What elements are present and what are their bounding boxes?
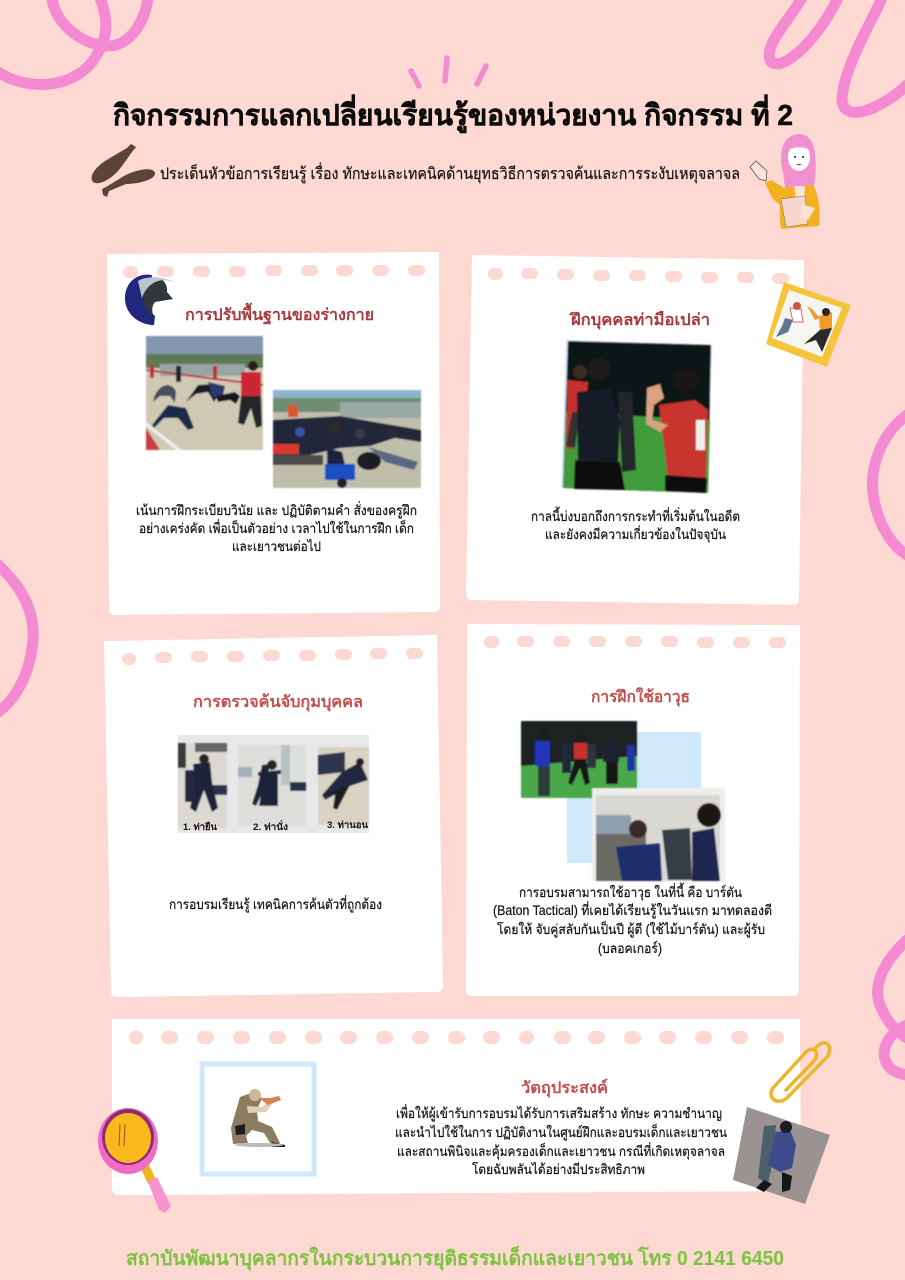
- footer contact: สถาบันพัฒนาบุคลากรในกระบวนการยุติธรรมเด็กและเยาวชน โทร 0 2141 6450: [126, 1245, 784, 1271]
- body text: กาลนี้บ่งบอกถึงการกระทำที่เริ่มต้นในอดีต: [531, 506, 740, 524]
- icon: woman with clipboard: [750, 134, 820, 229]
- icon: riot officer sticker: [733, 1107, 830, 1204]
- heading: การตรวจค้นจับกุมบุคคล: [193, 693, 363, 712]
- panel: search and arrest: [104, 635, 443, 997]
- body text: การอบรมสามารถใช้อาวุธ ในที่นี้ คือ บาร์ตัน: [519, 882, 742, 901]
- heading: การฝึกใช้อาวุธ: [591, 687, 690, 707]
- icon: helmet: [125, 275, 175, 325]
- body text: และนำไปใช้ในการ ปฏิบัติงานในศูนย์ฝึกและอบรมเด็กและเยาวชน: [395, 1123, 727, 1141]
- body text: (บลอคเกอร์): [598, 940, 662, 956]
- subtitle: ประเด็นหัวข้อการเรียนรู้ เรื่อง ทักษะและเทคนิคด้านยุทธวิธีการตรวจค้นและการระงับเหตุจลาจล: [160, 162, 740, 184]
- title: กิจกรรมการแลกเปลี่ยนเรียนรู้ของหน่วยงาน กิจกรรม ที่ 2: [113, 94, 793, 133]
- heading: วัตถุประสงค์: [521, 1078, 608, 1098]
- binder holes: [129, 1030, 784, 1044]
- frame with soldier icon: [202, 1064, 314, 1174]
- photo strip: search positions: 2. ท่านั่ง: [253, 819, 288, 833]
- body text: (Baton Tactical) ที่เคยได้เรียนรู้ในวันแรก มาทดลองตี: [493, 901, 772, 919]
- body text: และเยาวชนต่อไป: [232, 539, 321, 554]
- panel: body conditioning: [107, 252, 440, 615]
- photo strip: search positions: [178, 735, 369, 833]
- binder holes: [123, 265, 425, 278]
- icon: fighting couple sticker: [766, 282, 851, 367]
- photo strip: search positions: 3. ท่านอน: [327, 820, 369, 831]
- binder holes: [484, 636, 786, 648]
- body text: โดยให้ จับคู่สลับกันเป็นปี ผู้ตี (ใช้ไม้บาร์ตัน) และผู้รับ: [497, 920, 765, 938]
- body text: [493, 882, 772, 956]
- body text: [531, 506, 740, 543]
- panel: objectives: [112, 1019, 801, 1195]
- body text: การอบรมเรียนรู้ เทคนิคการค้นตัวที่ถูกต้อง: [169, 895, 382, 913]
- icon: sparkle strokes above title: [411, 58, 486, 86]
- body text: เพื่อให้ผู้เข้ารับการอบรมได้รับการเสริมสร้าง ทักษะ ความชำนาญ: [396, 1104, 722, 1122]
- icon: magnifying glass: [98, 1108, 171, 1213]
- body text: และสถานพินิจและคุ้มครองเด็กและเยาวชน กรณีที่เกิดเหตุจลาจล: [397, 1142, 725, 1160]
- panel: empty-hand training: [466, 255, 851, 605]
- icon: wooden batons: [92, 144, 155, 197]
- photo: pad striking: [561, 340, 712, 493]
- heading: การปรับพื้นฐานของร่างกาย: [185, 302, 374, 325]
- binder holes: [122, 648, 423, 665]
- body text: [395, 1104, 727, 1177]
- photo captions: 1. ท่ายืน: [183, 821, 217, 833]
- body text: โดยฉับพลันได้อย่างมีประสิทธิภาพ: [472, 1161, 645, 1177]
- body text: [136, 501, 417, 554]
- panel: weapons training: [466, 624, 800, 996]
- photo: baton practice indoors: [592, 788, 725, 881]
- icon: paperclip: [771, 1043, 830, 1101]
- photo: push-up drill: [146, 336, 263, 450]
- light blue backing square: [567, 732, 701, 863]
- body text: เน้นการฝึกระเบียบวินัย และ ปฏิบัติตามคำ สั่งของครูฝึก: [136, 501, 417, 519]
- body text: และยังคงมีความเกี่ยวข้องในปัจจุบัน: [545, 525, 726, 543]
- photo: group practice on turf: [521, 721, 637, 798]
- photo: group lying on ground: [273, 390, 421, 488]
- body text: อย่างเคร่งคัด เพื่อเป็นตัวอย่าง เวลาไปใช้ในการฝึก เด็ก: [139, 519, 414, 536]
- binder holes: [488, 268, 789, 284]
- heading: ฝึกบุคคลท่ามือเปล่า: [569, 311, 710, 330]
